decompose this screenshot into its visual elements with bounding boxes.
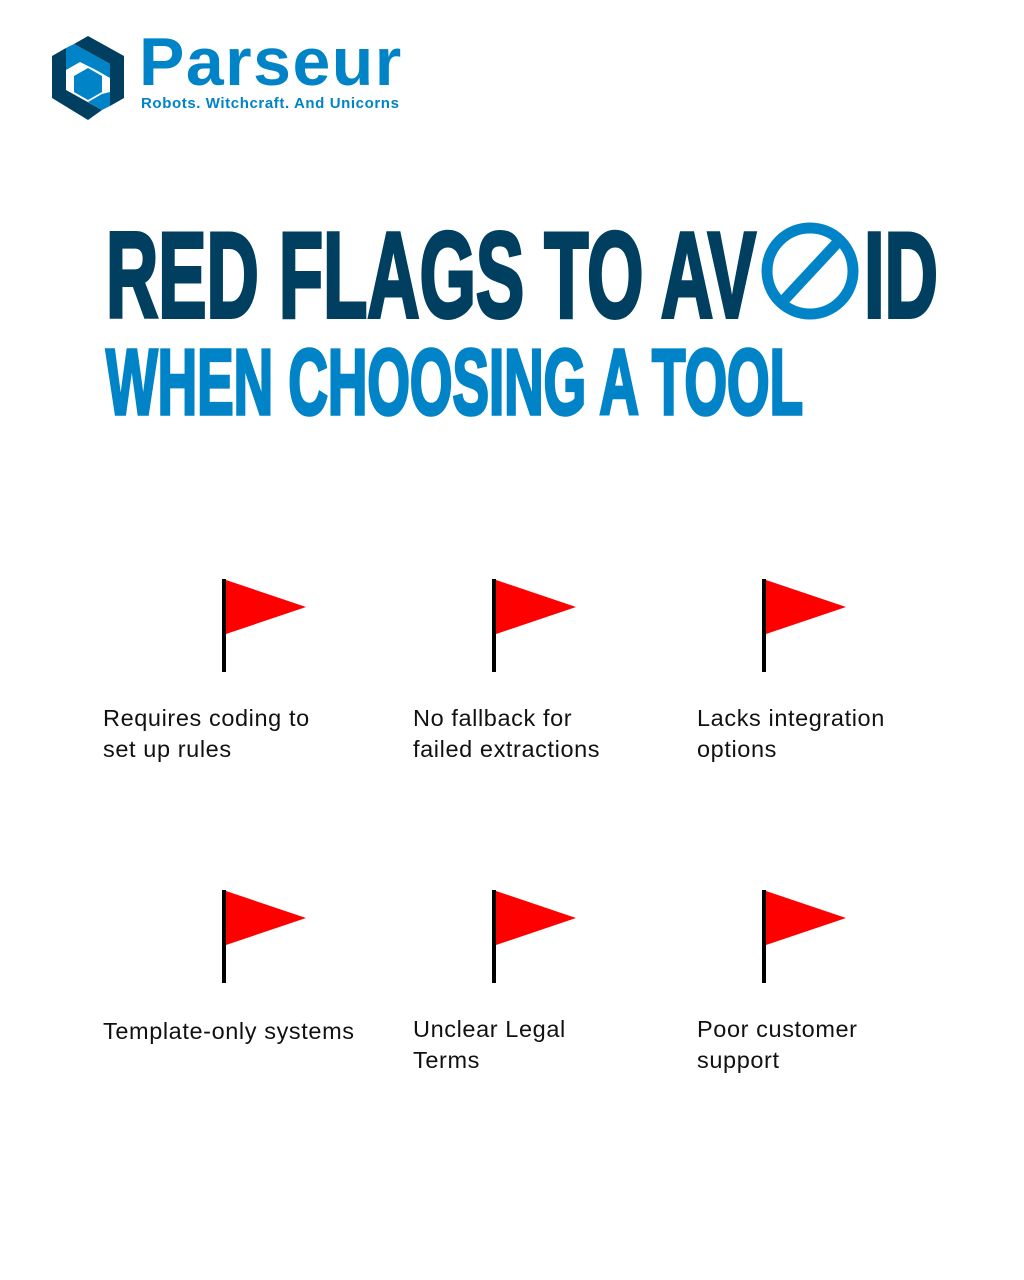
icon: prohibition circle xyxy=(767,228,853,314)
title: ID xyxy=(864,207,938,343)
text 5 xyxy=(413,1016,566,1073)
tagline: Robots. Witchcraft. And Unicorns xyxy=(141,95,400,112)
text 3: Lacks integration xyxy=(697,705,885,731)
flag 5 xyxy=(492,890,576,983)
text 1: Requires coding to xyxy=(103,705,310,731)
brand name: Parseur xyxy=(139,24,403,100)
text 1: set up rules xyxy=(103,736,232,762)
flag 4 xyxy=(222,890,306,983)
text 3 xyxy=(697,705,885,762)
icon: logo cube xyxy=(52,36,124,120)
text 1 xyxy=(103,705,310,762)
text 4: Template-only systems xyxy=(103,1018,355,1044)
flag 1 xyxy=(222,579,306,672)
text 2 xyxy=(413,705,600,762)
text 3: options xyxy=(697,736,777,762)
text 2: No fallback for xyxy=(413,705,572,731)
flag 2 xyxy=(492,579,576,672)
text 6 xyxy=(697,1016,858,1073)
text 5: Unclear Legal xyxy=(413,1016,566,1042)
text 6: Poor customer xyxy=(697,1016,858,1042)
text 6: support xyxy=(697,1047,780,1073)
title xyxy=(104,207,938,434)
text 5: Terms xyxy=(413,1047,480,1073)
flag 3 xyxy=(762,579,846,672)
flag 6 xyxy=(762,890,846,983)
text 2: failed extractions xyxy=(413,736,600,762)
logo xyxy=(52,24,403,120)
